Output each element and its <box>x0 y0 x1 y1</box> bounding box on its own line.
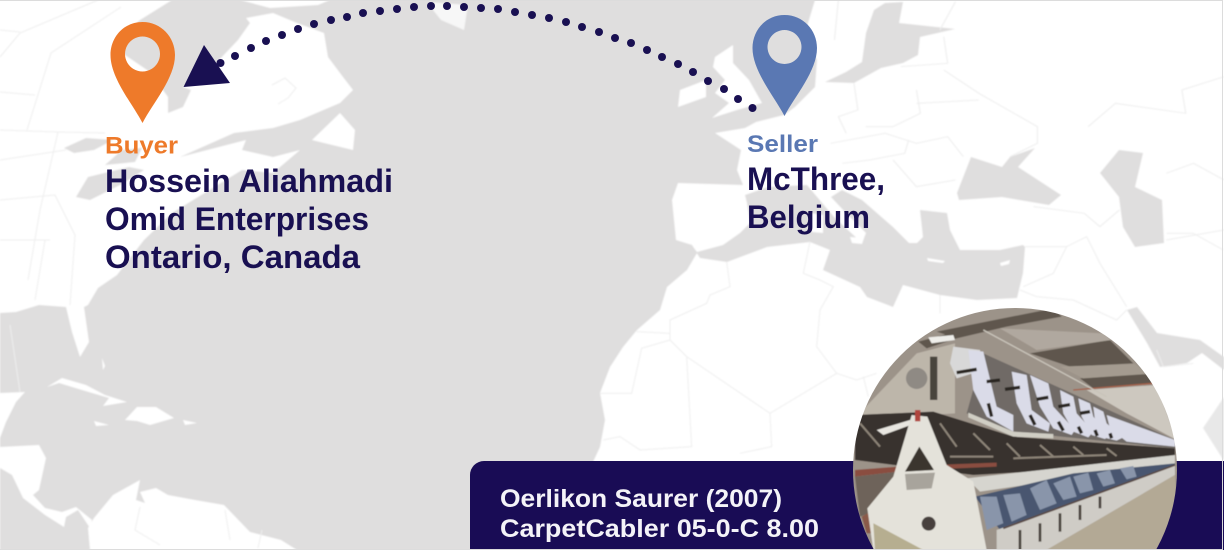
sea: Persian Gulf <box>1127 307 1224 370</box>
dark mid section <box>855 412 1175 475</box>
upper bobbin backing <box>967 353 1175 448</box>
seller text block <box>747 131 885 235</box>
land: North America <box>0 0 353 357</box>
buyer text block <box>105 132 393 275</box>
seller name: McThree, <box>747 161 885 197</box>
buyer location: Ontario, Canada <box>105 239 360 275</box>
sea: Mediterranean <box>690 185 1025 307</box>
seller country: Belgium <box>747 199 870 235</box>
back wall <box>1087 385 1177 440</box>
white rail <box>997 465 1175 550</box>
icon: seller location pin <box>752 15 817 116</box>
arrowhead <box>184 45 230 87</box>
land: Mexico <box>0 392 25 438</box>
buyer name: Hossein Aliahmadi <box>105 163 393 199</box>
left background <box>862 343 956 416</box>
land: Arctic islands <box>240 0 468 150</box>
floor <box>1047 475 1180 550</box>
machine model: CarpetCabler 05-0-C 8.00 <box>500 515 819 543</box>
sea: Baltic <box>825 2 955 83</box>
dotted route arc from seller to buyer <box>216 2 756 112</box>
land: Caribbean islands <box>47 358 197 426</box>
land: South America <box>88 480 297 550</box>
land: Central America <box>0 445 92 528</box>
sea: Arabian Sea <box>1203 397 1224 461</box>
red stripe <box>855 463 997 477</box>
buyer company: Omid Enterprises <box>105 201 369 237</box>
sea: Caspian <box>1100 150 1164 247</box>
ceiling beams <box>918 308 1157 388</box>
buyer label: Buyer <box>105 132 178 160</box>
lakes <box>64 138 144 200</box>
circular photo of carpet cabling machine <box>853 308 1177 549</box>
upper white bobbins <box>968 350 1175 447</box>
seller label: Seller <box>747 131 818 158</box>
islands: British Isles and Mediterranean <box>678 45 1010 266</box>
land: Europe, Africa and Asia <box>590 0 1224 550</box>
icon: buyer location pin <box>110 22 175 123</box>
white machine end <box>867 415 987 550</box>
sea: Black Sea <box>957 148 1061 205</box>
lower blue bobbins <box>975 463 1175 530</box>
white shelf <box>967 455 1175 492</box>
machine maker and year: Oerlikon Saurer (2007) <box>500 485 782 513</box>
machine caption panel <box>470 461 1224 550</box>
